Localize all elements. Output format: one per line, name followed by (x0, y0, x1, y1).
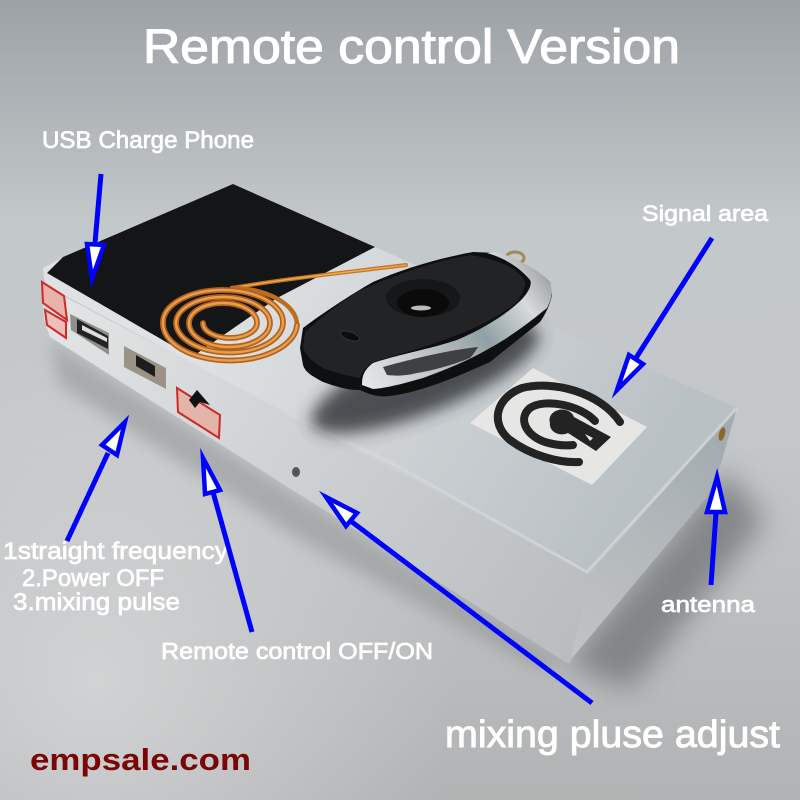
arrow: switch modes (67, 422, 125, 541)
fob button (386, 279, 460, 317)
label: mixing pluse adjust: mixing pluse adjust (445, 714, 780, 756)
label: Remote control OFF/ON: Remote control OFF/ON (161, 638, 433, 664)
signal icon key (549, 410, 611, 451)
screw hole (292, 467, 300, 477)
arrow: antenna (707, 477, 725, 585)
fob LED (339, 329, 361, 343)
USB port (70, 314, 109, 355)
label: switch modes (3, 538, 228, 616)
label: switch modes: 1straight frequency (3, 538, 228, 565)
label: switch modes: 3.mixing pulse (13, 589, 180, 616)
key ring (506, 252, 524, 264)
fob face (303, 255, 525, 378)
mode switch (124, 346, 166, 389)
device end face (568, 408, 737, 663)
copper coil (163, 265, 406, 361)
title: Remote control Version (143, 21, 680, 74)
remote control fob (299, 252, 552, 455)
label: switch modes: 2.Power OFF (22, 565, 164, 592)
arrow: remote control switch (203, 458, 252, 632)
brand: empsale.com: empsale.com (30, 742, 251, 777)
device front face (42, 285, 590, 663)
arrow: mixing pulse adjust (326, 497, 592, 703)
signal area sticker (470, 368, 647, 485)
remote toggle switch (189, 390, 210, 408)
fob chrome rim (362, 252, 552, 389)
signal icon rings (498, 386, 620, 462)
device top face (43, 184, 737, 574)
fob chrome slot (383, 347, 478, 376)
device shadow on surface (50, 340, 765, 690)
arrow: USB charge (87, 174, 104, 279)
label: Signal area: Signal area (642, 201, 769, 226)
black battery panel (47, 184, 375, 357)
antenna socket (717, 426, 727, 442)
white metal device (42, 184, 737, 663)
bent edge highlight (280, 408, 737, 572)
label: antenna: antenna (661, 592, 756, 617)
arrow: signal area (617, 238, 712, 390)
fob body (300, 252, 552, 396)
label: USB Charge Phone: USB Charge Phone (42, 127, 254, 154)
fob shadow (299, 301, 551, 455)
red warning stickers (42, 282, 220, 438)
